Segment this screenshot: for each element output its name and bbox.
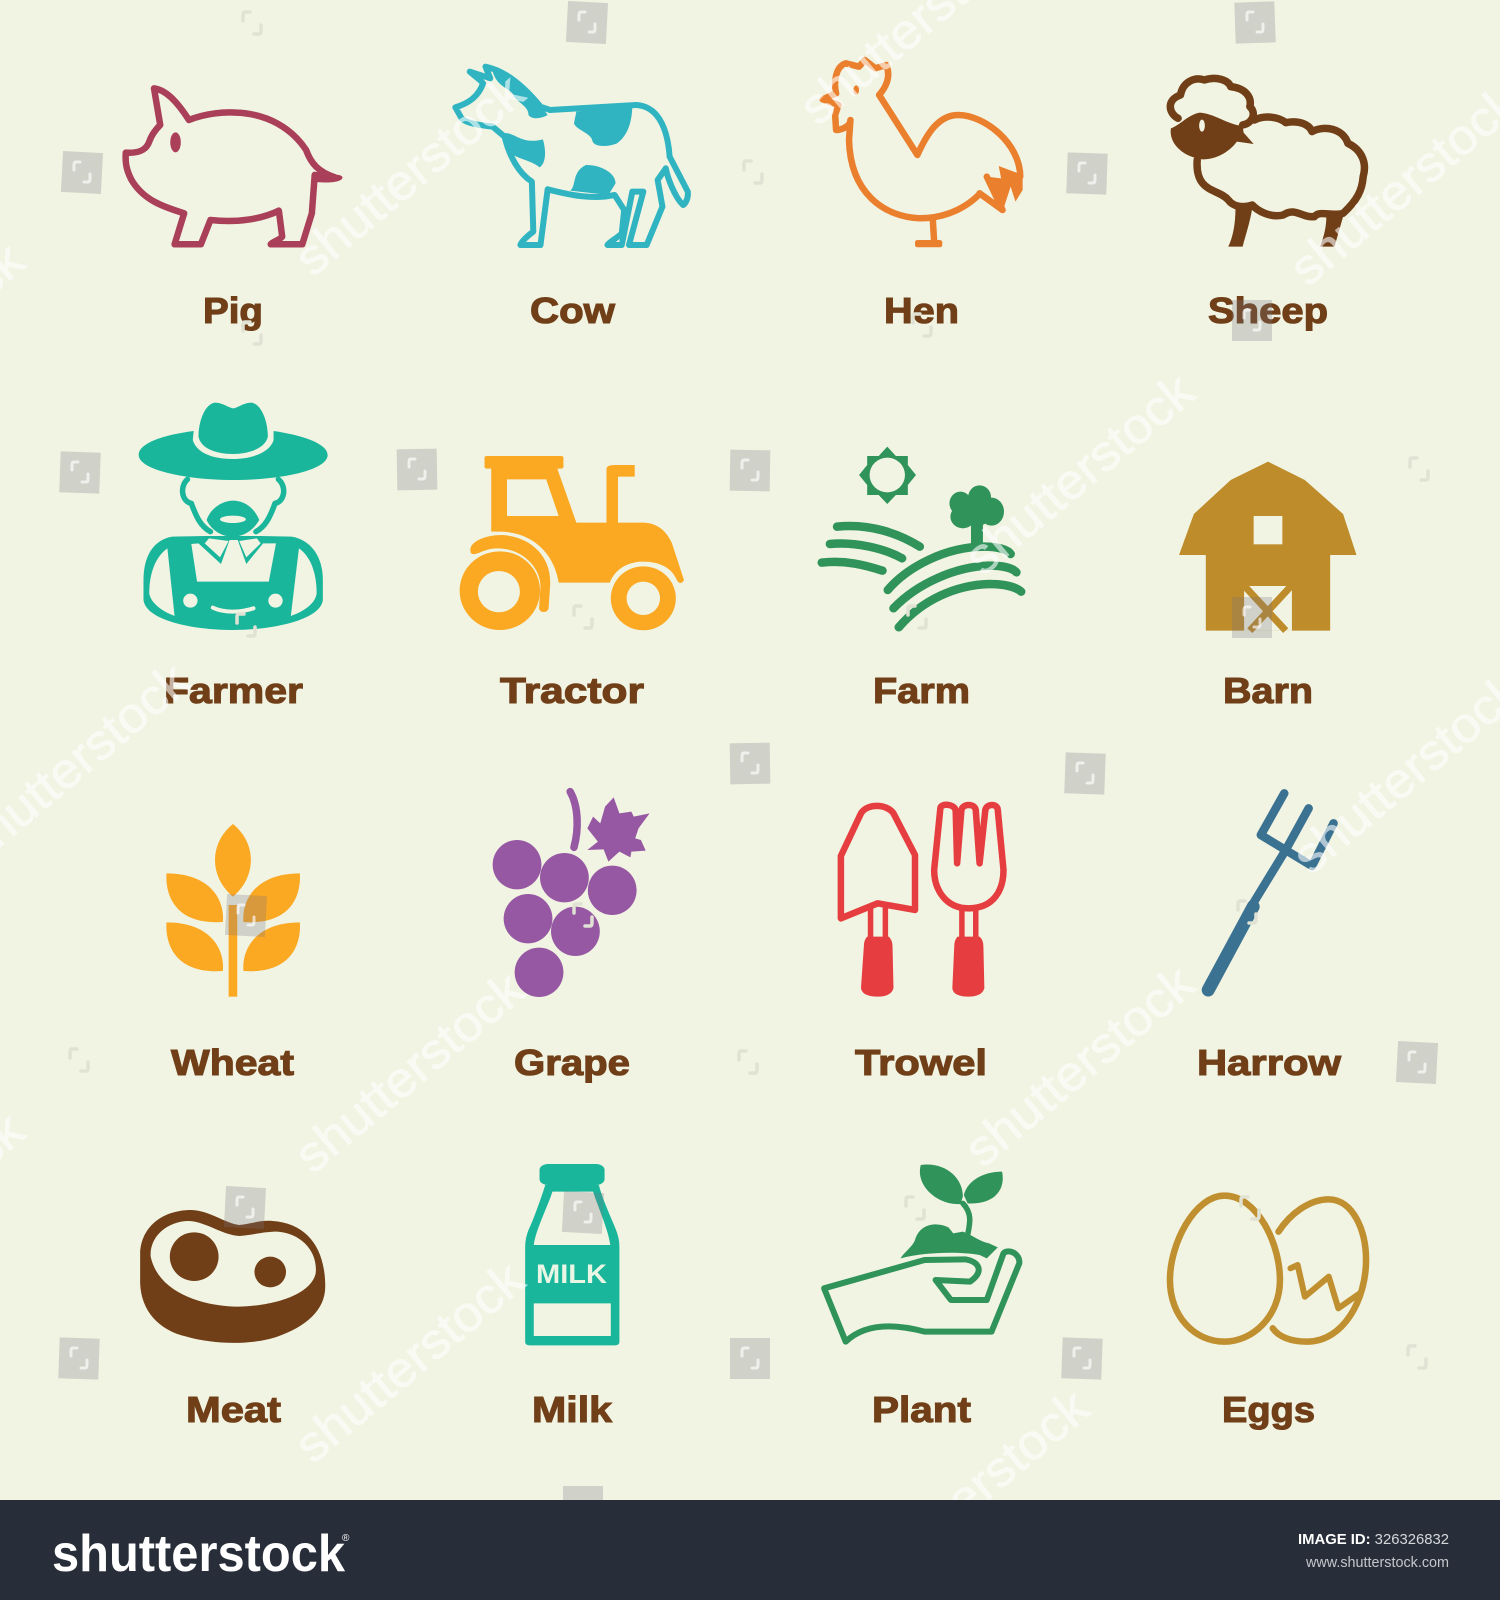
- footer logo: shutterstock: [52, 1525, 345, 1583]
- panel: farm: [822, 447, 1021, 711]
- icon: plant in hand: [824, 1165, 1019, 1342]
- panel: tractor: [460, 456, 684, 711]
- panel: trowel: [841, 805, 1003, 1083]
- panel: barn: [1179, 462, 1356, 711]
- panel: meat: [140, 1210, 325, 1430]
- watermark: repeated text: shutterstock: [849, 1378, 1100, 1600]
- panel: milk: [525, 1164, 619, 1430]
- label: Wheat: Wheat: [171, 1042, 294, 1083]
- panel: eggs: [1170, 1196, 1366, 1430]
- panel: plant: [824, 1165, 1019, 1430]
- label: Meat: Meat: [186, 1389, 281, 1430]
- icon: farmer: [139, 403, 328, 630]
- watermark: repeated text: shutterstock: [284, 63, 535, 286]
- label: Farmer: Farmer: [164, 670, 303, 711]
- panel: harrow: [1197, 793, 1342, 1083]
- image id text: IMAGE ID: 326326832: [1298, 1531, 1449, 1548]
- label: Plant: Plant: [872, 1389, 971, 1430]
- icon: pig: [126, 88, 342, 244]
- watermark: repeated text: shutterstock: [954, 362, 1205, 585]
- label: Harrow: Harrow: [1197, 1042, 1342, 1083]
- panel: grape: [493, 792, 650, 1083]
- icon: milk bottle: MILK: [536, 1259, 608, 1289]
- panel: sheep: [1170, 78, 1364, 331]
- label: Barn: Barn: [1223, 670, 1313, 711]
- label: Eggs: Eggs: [1222, 1389, 1315, 1430]
- icon: wheat: [166, 824, 300, 997]
- icon: harrow: [1208, 793, 1334, 990]
- panel: pig: [126, 88, 342, 331]
- footer bar: [0, 1500, 1500, 1600]
- icon: farm: [822, 447, 1021, 627]
- icon: eggs: [1170, 1196, 1366, 1342]
- watermark: repeated text: shutterstock: [954, 954, 1205, 1177]
- icon: tractor: [460, 456, 684, 630]
- icon: cow: [455, 67, 688, 245]
- label: Tractor: Tractor: [500, 670, 644, 711]
- panel: farmer: [139, 403, 328, 711]
- icon: milk bottle: [525, 1164, 619, 1345]
- footer logo: ®: [342, 1533, 350, 1544]
- icon: barn: [1179, 462, 1356, 631]
- panel: cow: [455, 67, 688, 331]
- watermark: repeated text: shutterstock: [284, 1250, 535, 1473]
- icon: sheep: [1170, 78, 1364, 247]
- panel: wheat: [166, 824, 300, 1083]
- icon: trowel and fork: [841, 805, 1003, 997]
- watermark: repeated text: shutterstock: [284, 960, 535, 1183]
- website text: www.shutterstock.com: [1305, 1554, 1449, 1571]
- icon: grape: [493, 792, 650, 997]
- watermark: small outlined marks: [70, 12, 1428, 1368]
- icon: meat: [140, 1210, 325, 1343]
- label: Farm: Farm: [873, 670, 970, 711]
- label: Sheep: Sheep: [1208, 290, 1328, 331]
- label: Hen: Hen: [884, 290, 959, 331]
- label: Pig: Pig: [203, 290, 263, 331]
- icon: hen: [823, 60, 1023, 247]
- label: Trowel: Trowel: [855, 1042, 987, 1083]
- label: Milk: Milk: [532, 1389, 613, 1430]
- label: Cow: Cow: [530, 290, 616, 331]
- panel: hen: [823, 60, 1023, 331]
- label: Grape: Grape: [514, 1042, 630, 1083]
